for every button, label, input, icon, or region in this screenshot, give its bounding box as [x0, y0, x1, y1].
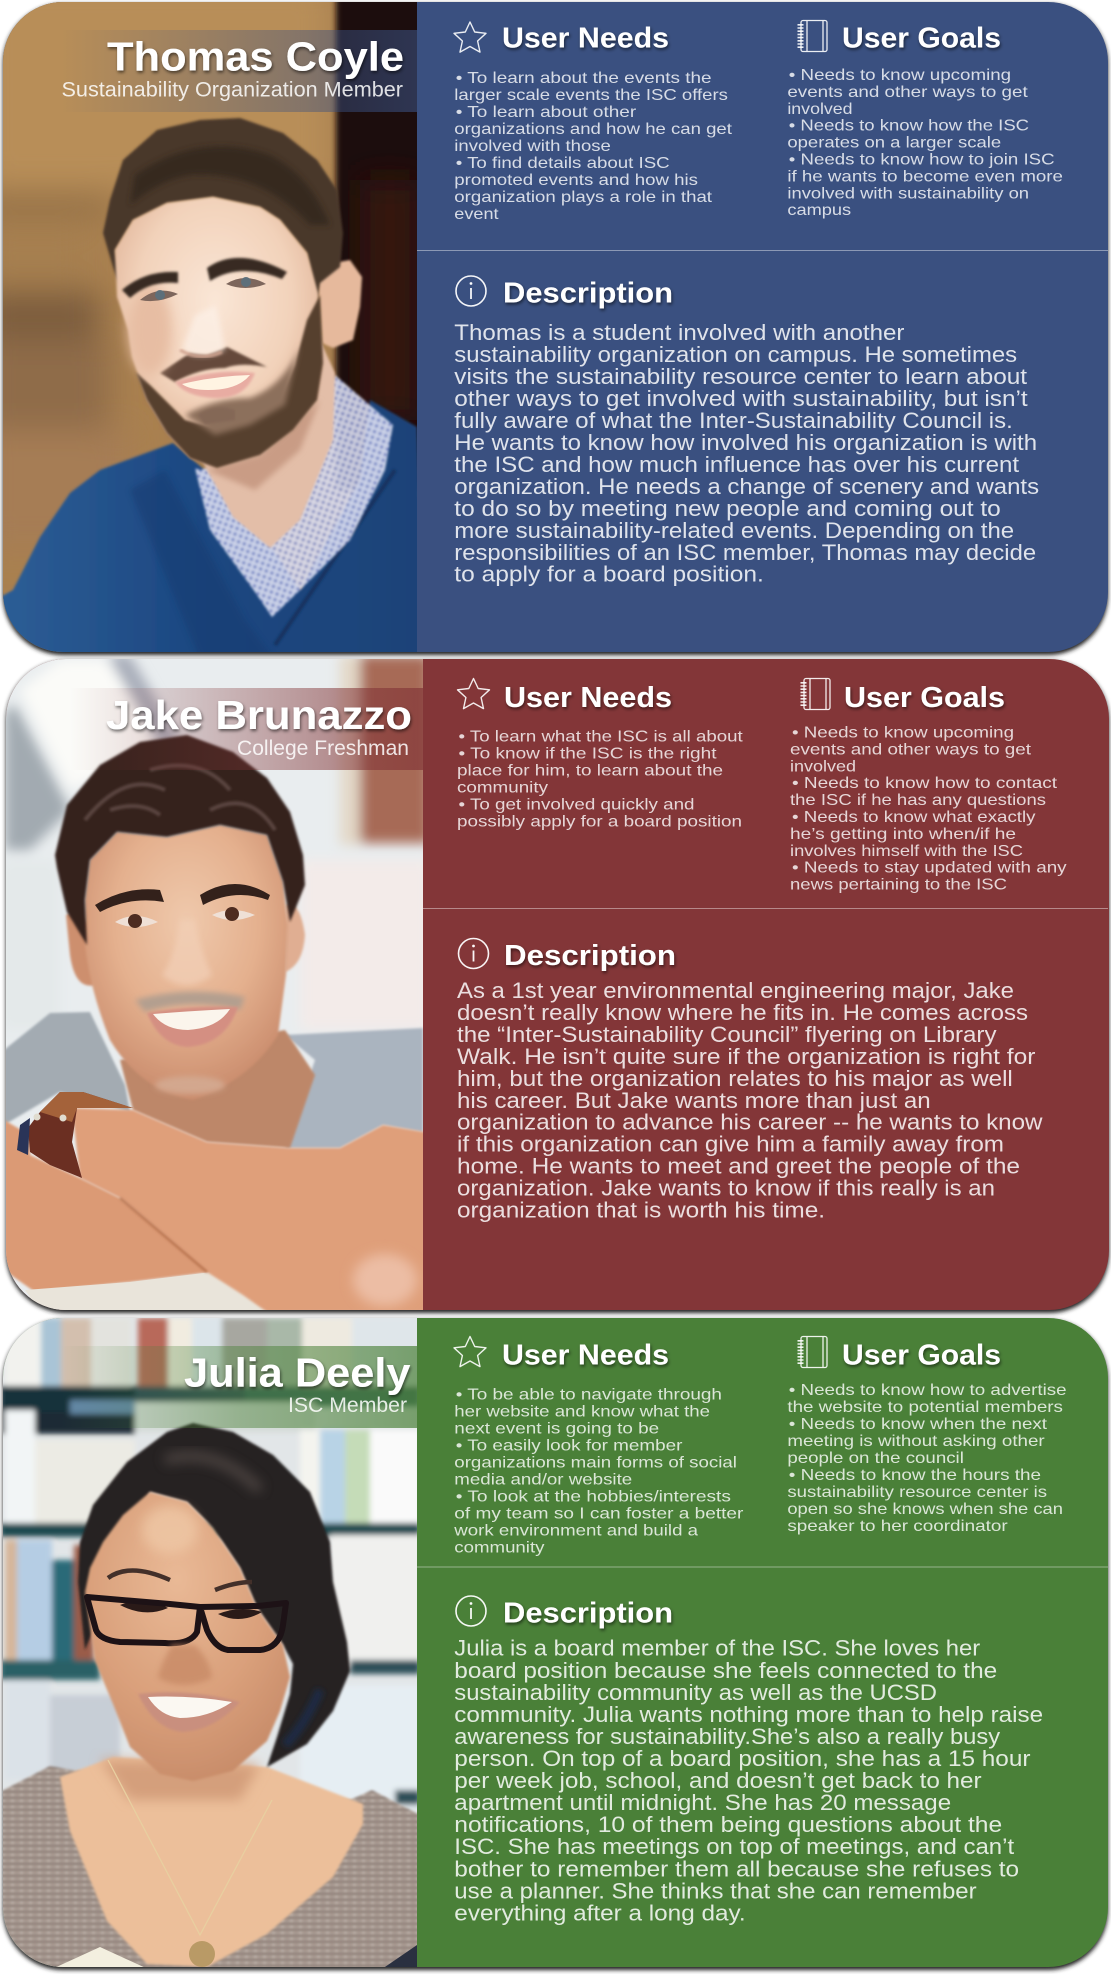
- text: user goals list: open so she knows when she can: [787, 1501, 1063, 1518]
- card background: [3, 2, 1108, 652]
- text: user goals list: involved: [790, 758, 856, 775]
- beard: [136, 295, 323, 468]
- sweater: [0, 400, 425, 660]
- hair: [78, 1423, 350, 1767]
- text: description paragraph: home. He wants to meet and greet the people of the: [457, 1154, 1020, 1179]
- name: Jake Brunazzo: Jake Brunazzo: [106, 692, 412, 738]
- text: user goals list: campus: [787, 202, 851, 219]
- mouth: [138, 1692, 240, 1732]
- t-shirt right: [285, 1028, 423, 1148]
- icon: star: [454, 22, 486, 52]
- nose: [182, 305, 225, 356]
- heading: Description: Description: [504, 940, 676, 972]
- text: user needs list: [454, 70, 733, 223]
- text: description paragraph: As a 1st year environmental engineering major, Jake: [457, 978, 1014, 1003]
- text: description paragraph: other ways to get involved with sustainability, but isn’t: [454, 386, 1028, 411]
- text: user goals list: involves himself with the ISC: [790, 843, 1023, 860]
- text: description paragraph: him, but the organization relates to his major as well: [457, 1066, 1013, 1091]
- card background: [6, 659, 1109, 1310]
- mouth: [147, 1007, 238, 1047]
- text: description paragraph: if this organization can give him a family away from: [457, 1132, 1004, 1157]
- heading: Description: Description: [503, 278, 673, 310]
- sweater: [0, 1766, 420, 1970]
- chin shading: [155, 1076, 225, 1094]
- card shadow: [6, 661, 1109, 1313]
- text: description paragraph: organization that is worth his time.: [457, 1198, 825, 1222]
- panel: Julia Deely persona card: [0, 1315, 1108, 1970]
- hair highlight: [165, 1456, 260, 1490]
- text: description paragraph: organization. Jake wants to know if this really is an: [457, 1176, 995, 1200]
- text: user needs list: organization plays a role in that: [454, 189, 713, 206]
- text: user goals list: • Needs to know how the ISC: [789, 118, 1029, 135]
- text: description paragraph: awareness for sustainability.She’s also a really busy: [454, 1724, 1000, 1749]
- forehead highlight: [142, 1506, 198, 1554]
- text: description paragraph: the ISC and how much influence has over his current: [454, 452, 1019, 477]
- role: Sustainability Organization Member: Sustainability Organization Member: [62, 78, 403, 102]
- text: user goals list: the website to potential members: [787, 1399, 1063, 1416]
- text: user needs list: possibly apply for a board position: [457, 814, 742, 830]
- hair: [103, 118, 343, 300]
- role: College Freshman: College Freshman: [237, 737, 409, 760]
- name band: [60, 30, 417, 112]
- text: user goals list: news pertaining to the ISC: [790, 877, 1007, 894]
- divider: [423, 908, 1108, 910]
- table: [25, 1272, 270, 1312]
- panel: Jake Brunazzo persona card: [0, 655, 1109, 1315]
- nose: [158, 1645, 212, 1685]
- text: user goals list: [787, 67, 1063, 219]
- divider: [417, 250, 1108, 252]
- text: user needs list: promoted events and how his: [454, 172, 698, 189]
- text: user needs list: involved with those: [454, 138, 611, 155]
- text: description paragraph: [457, 978, 1043, 1222]
- text: description paragraph: board position because she feels connected to the: [454, 1658, 997, 1683]
- text: description paragraph: community. Julia wants nothing more than to help raise: [454, 1702, 1043, 1727]
- text: user goals list: events and other ways to get: [787, 84, 1028, 101]
- text: user goals list: • Needs to know how to advertise: [789, 1382, 1067, 1399]
- divider: [417, 1566, 1108, 1568]
- text: user goals list: sustainability resource center is: [787, 1484, 1047, 1501]
- text: user goals list: the ISC if he has any questions: [790, 792, 1046, 809]
- text: description paragraph: apartment until midnight. She has 20 message: [454, 1790, 951, 1815]
- text: user goals list: speaker to her coordinator: [787, 1518, 1009, 1535]
- icon: info: [456, 1596, 486, 1626]
- t-shirt left: [4, 1012, 130, 1125]
- text: user goals list: [787, 1382, 1067, 1535]
- eyes: [120, 1601, 168, 1612]
- name band: [60, 1346, 417, 1428]
- text: description paragraph: fully aware of what the Inter-Sustainability Council is.: [454, 408, 1013, 433]
- text: user needs list: • To learn about other: [456, 104, 637, 121]
- face: [85, 825, 288, 1100]
- text: user needs list: • To learn what the ISC is all about: [458, 728, 743, 746]
- text: user goals list: events and other ways to get: [790, 741, 1032, 758]
- text: description paragraph: Thomas is a student involved with another: [454, 320, 904, 345]
- text: user needs list: event: [454, 206, 499, 223]
- text: user goals list: • Needs to know upcoming: [789, 67, 1011, 84]
- photo: Julia Deely portrait: [0, 1315, 420, 1970]
- text: user goals list: if he wants to become even more: [787, 168, 1063, 185]
- heading: User Needs: User Needs: [502, 1340, 669, 1372]
- text: user needs list: • To easily look for member: [456, 1437, 683, 1455]
- text: user needs list: organizations main forms of social: [454, 1454, 737, 1472]
- text: description paragraph: organization. He needs a change of scenery and wants: [454, 474, 1039, 499]
- text: user needs list: • To find details about ISC: [456, 155, 670, 172]
- role: ISC Member: ISC Member: [288, 1394, 407, 1417]
- heading: User Needs: User Needs: [502, 22, 669, 54]
- text: user needs list: media and/or website: [454, 1471, 632, 1489]
- ear: [318, 260, 362, 348]
- brows and eyes: [95, 889, 164, 912]
- neck and chest: [60, 1757, 363, 1967]
- arm: lower: [4, 1120, 212, 1292]
- text: user goals list: • Needs to know upcoming: [792, 724, 1014, 742]
- text: description paragraph: more sustainability-related events. Depending on the: [454, 518, 1014, 543]
- text: description paragraph: use a planner. She thinks that she can remember: [454, 1878, 977, 1903]
- text: description paragraph: sustainability organization on campus. He sometimes: [454, 342, 1017, 367]
- icon: notebook: [800, 20, 827, 52]
- card background: [3, 1318, 1108, 1967]
- text: description paragraph: responsibilities of an ISC member, Thomas may decide: [454, 540, 1036, 565]
- brows: [108, 1570, 170, 1580]
- text: user goals list: people on the council: [787, 1450, 964, 1467]
- text: user needs list: • To know if the ISC is the right: [458, 746, 717, 762]
- text: user goals list: meeting is without asking other: [787, 1433, 1045, 1450]
- text: user goals list: • Needs to stay updated with any: [792, 860, 1067, 877]
- text: user needs list: • To be able to navigate through: [456, 1386, 722, 1404]
- text: description paragraph: ISC. She has meetings on top of meetings, and can’t: [454, 1834, 1014, 1859]
- text: user goals list: involved with sustainability on: [787, 185, 1029, 202]
- heading: User Goals: User Goals: [842, 22, 1001, 54]
- text: description paragraph: his career. But Jake wants more than just an: [457, 1088, 931, 1113]
- text: description paragraph: [454, 320, 1039, 587]
- text: user needs list: her website and know what the: [454, 1403, 710, 1421]
- text: user goals list: [790, 724, 1067, 894]
- icon: info: [456, 276, 486, 306]
- text: description paragraph: doesn’t really know where he fits in. He comes across: [457, 1000, 1028, 1025]
- text: user needs list: community: [457, 780, 548, 796]
- text: user goals list: • Needs to know the hours the: [789, 1467, 1041, 1484]
- text: description paragraph: to apply for a board position.: [454, 561, 764, 587]
- card shadow: [3, 1320, 1108, 1970]
- mustache and mouth: [160, 347, 267, 382]
- necklace: [108, 1760, 272, 1935]
- text: description paragraph: Julia is a board member of the ISC. She loves her: [454, 1636, 980, 1661]
- heading: User Goals: User Goals: [844, 682, 1005, 714]
- name: Julia Deely: Julia Deely: [184, 1350, 411, 1396]
- text: user needs list: community: [454, 1539, 544, 1557]
- icon: star: [454, 1336, 486, 1367]
- neck: [202, 344, 337, 548]
- text: user goals list: involved: [787, 101, 853, 118]
- text: user needs list: next event is going to be: [454, 1420, 659, 1438]
- text: description paragraph: per week job, school, and doesn’t get back to her: [454, 1768, 982, 1793]
- text: user needs list: • To learn about the events the: [456, 70, 712, 87]
- panel: Thomas Coyle persona card: [0, 0, 1108, 660]
- text: description paragraph: the “Inter-Sustainability Council” flyering on Library: [457, 1022, 996, 1047]
- name band: [70, 688, 423, 770]
- text: user needs list: organizations and how he can get: [454, 121, 733, 138]
- text: user goals list: • Needs to know how to contact: [792, 775, 1058, 792]
- icon: notebook: [804, 678, 830, 710]
- text: user needs list: place for him, to learn about the: [457, 762, 723, 780]
- photo: Thomas Coyle portrait: [0, 0, 426, 660]
- text: user goals list: operates on a larger scale: [787, 135, 1001, 152]
- nose: [162, 920, 212, 985]
- stubble: [135, 992, 245, 1012]
- text: description paragraph: Walk. He isn’t quite sure if the organization is right for: [457, 1044, 1035, 1069]
- eyes and brows: [122, 272, 178, 298]
- text: description paragraph: sustainability community as well as the UCSD: [454, 1680, 937, 1705]
- text: user goals list: • Needs to know what exactly: [792, 809, 1036, 826]
- heading: Description: Description: [503, 1598, 673, 1630]
- heading: User Goals: User Goals: [842, 1340, 1001, 1372]
- face: [85, 1492, 290, 1781]
- text: user goals list: he’s getting into when/if he: [790, 826, 1016, 843]
- photo: Jake Brunazzo portrait: [0, 655, 430, 1315]
- text: description paragraph: bother to remember them all because she refuses to: [454, 1856, 1019, 1881]
- hair: [55, 735, 305, 945]
- icon: info: [458, 938, 488, 968]
- leather wristband: [28, 1092, 133, 1178]
- text: description paragraph: person. On top of a board position, she has a 15 hour: [454, 1746, 1030, 1771]
- text: user needs list: • To get involved quickly and: [458, 796, 694, 814]
- text: user needs list: • To look at the hobbies/interests: [456, 1488, 731, 1506]
- heading: User Needs: User Needs: [504, 682, 672, 714]
- text: user needs list: [453, 1386, 744, 1557]
- collar: [195, 375, 393, 617]
- blurred bookshelf: [0, 1318, 420, 1810]
- ears: [66, 913, 95, 986]
- neck: [120, 1030, 315, 1148]
- pendant: [189, 1941, 215, 1967]
- text: user needs list: work environment and build a: [453, 1522, 698, 1540]
- text: description paragraph: [454, 1636, 1043, 1925]
- cheek shading: [128, 285, 172, 375]
- text: user needs list: larger scale events the ISC offers: [454, 87, 728, 104]
- text: description paragraph: everything after a long day.: [454, 1900, 746, 1925]
- book: [56, 1947, 144, 1967]
- text: user needs list: of my team so I can foster a better: [454, 1505, 744, 1523]
- text: user goals list: • Needs to know when the next: [789, 1416, 1048, 1433]
- text: description paragraph: notifications, 10 of them being questions about the: [454, 1812, 1002, 1837]
- text: user needs list: [457, 728, 743, 830]
- arm: upper: [72, 1108, 425, 1312]
- face: [115, 197, 323, 468]
- text: description paragraph: to do so by meeting new people and coming out to: [454, 496, 1001, 521]
- glasses frame: [87, 1597, 286, 1650]
- icon: star: [458, 678, 490, 709]
- text: description paragraph: visits the sustainability resource center to learn about: [454, 364, 1027, 389]
- name: Thomas Coyle: Thomas Coyle: [107, 34, 404, 80]
- icon: notebook: [800, 1336, 827, 1368]
- text: user goals list: • Needs to know how to join ISC: [789, 151, 1055, 169]
- text: description paragraph: He wants to know how involved his organization is with: [454, 430, 1037, 455]
- card shadow: [3, 4, 1108, 655]
- text: description paragraph: organization to advance his career -- he wants to know: [457, 1110, 1043, 1135]
